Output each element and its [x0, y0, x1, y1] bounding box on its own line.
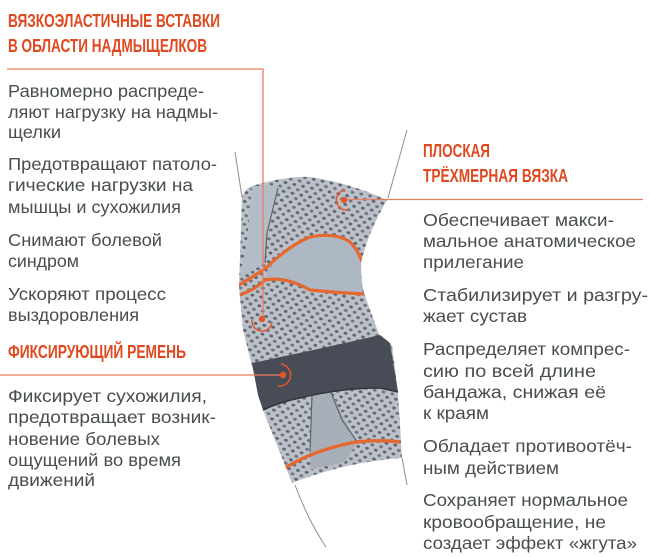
text block: inserts benefits: Равномерно распреде-	[8, 81, 204, 101]
text block: strap benefits: Фиксирует сухожилия,	[8, 386, 207, 406]
text block: knit benefits: к краям	[423, 403, 489, 423]
callout: strap leader	[0, 364, 291, 386]
heading: flat 3D knit: ТРЁХМЕРНАЯ ВЯЗКА	[423, 165, 568, 186]
seam lines	[265, 188, 358, 452]
heading: flat 3D knit	[423, 140, 568, 186]
text block: strap benefits: ощущений во время	[8, 450, 181, 470]
text block: inserts benefits: выздоровления	[8, 305, 139, 325]
viscoelastic centre panel	[266, 235, 363, 293]
rib panel lower centre	[310, 390, 357, 470]
text block: inserts benefits: Предотвращают патоло-	[8, 154, 217, 174]
text block: inserts benefits: ляют нагрузку на надмы-	[8, 102, 218, 122]
text block: knit benefits: Обеспечивает макси-	[423, 210, 614, 230]
text block: knit benefits	[423, 210, 648, 553]
heading: viscoelastic inserts: В ОБЛАСТИ НАДМЫЩЕЛКОВ	[8, 35, 207, 56]
text block: strap benefits	[8, 386, 216, 490]
heading: flat 3D knit: ПЛОСКАЯ	[423, 140, 490, 161]
heading: viscoelastic inserts: ВЯЗКОЭЛАСТИЧНЫЕ ВСТАВКИ	[8, 10, 220, 31]
text block: knit benefits: мальное анатомическое	[423, 231, 636, 251]
text block: knit benefits: жает сустав	[423, 306, 527, 326]
text block: knit benefits: сию по всей длине	[423, 361, 596, 381]
text block: knit benefits: создает эффект «жгута»	[423, 533, 637, 553]
text block: strap benefits: новение болевых	[8, 429, 160, 449]
text block: knit benefits: Распределяет компрес-	[423, 339, 630, 359]
elbow brace illustration	[237, 177, 402, 483]
compression strap	[252, 335, 398, 410]
text block: inserts benefits: Снимают болевой	[8, 230, 162, 250]
heading: fixing strap: ФИКСИРУЮЩИЙ РЕМЕНЬ	[8, 341, 186, 362]
text block: knit benefits: Обладает противоотёч-	[423, 436, 632, 456]
text block: inserts benefits	[8, 81, 218, 325]
text block: strap benefits: предотвращает возник-	[8, 407, 216, 427]
text block: knit benefits: Сохраняет нормальное	[423, 490, 628, 510]
text block: inserts benefits: щелки	[8, 122, 61, 142]
knitted sleeve body	[239, 177, 402, 483]
text block: knit benefits: кровообращение, не	[423, 512, 606, 532]
text block: knit benefits: бандажа, снижая её	[423, 382, 606, 402]
text block: inserts benefits: мышцы и сухожилия	[8, 197, 181, 217]
text block: inserts benefits: гические нагрузки на	[8, 175, 193, 195]
orange band upper	[237, 235, 363, 286]
text block: inserts benefits: синдром	[8, 251, 79, 271]
orange band lower	[237, 279, 365, 296]
smooth panel upper left	[242, 186, 277, 274]
callout: knit leader	[336, 190, 643, 210]
heading: viscoelastic inserts	[8, 10, 220, 56]
orange band bottom	[285, 441, 400, 468]
text block: knit benefits: ным действием	[423, 458, 559, 478]
text block: inserts benefits: Ускоряют процесс	[8, 284, 166, 304]
text block: knit benefits: прилегание	[423, 252, 524, 272]
text block: strap benefits: движений	[8, 470, 95, 490]
sleeve silhouette guide lines	[235, 130, 407, 547]
callout: viscoelastic inserts leader	[7, 69, 272, 331]
text block: knit benefits: Стабилизирует и разгру-	[423, 285, 648, 305]
